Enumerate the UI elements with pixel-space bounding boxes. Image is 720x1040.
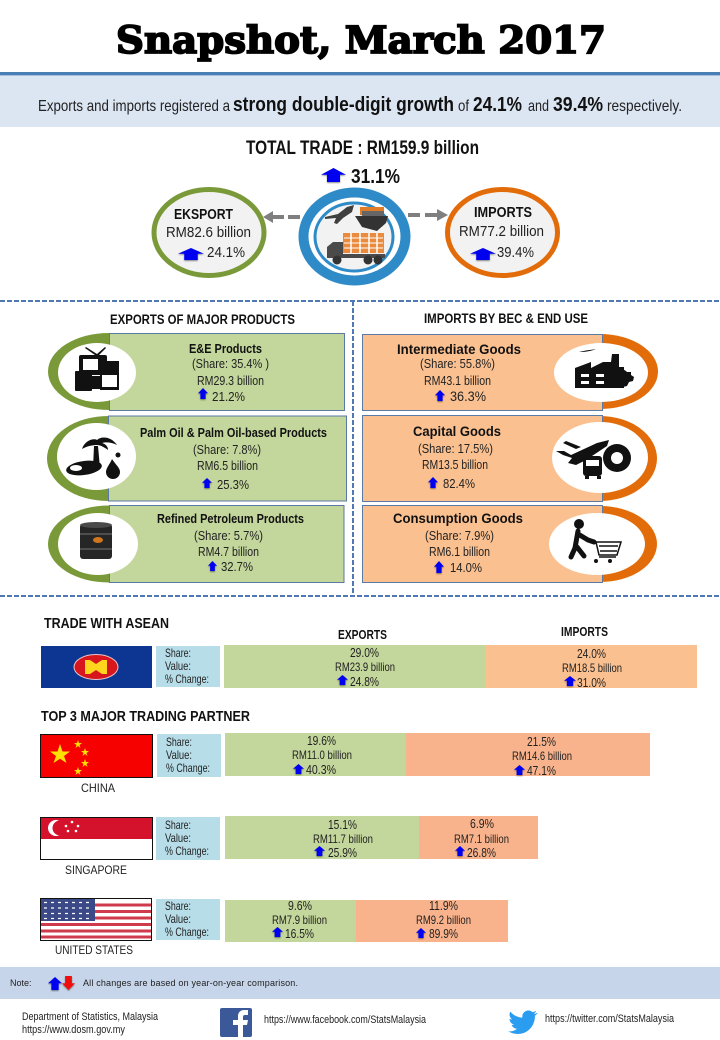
label: United States: UNITED STATES [55, 943, 133, 957]
summary band: 39.4% [553, 94, 603, 116]
bar: China exports: 40.3% [306, 763, 336, 777]
panel: intermediate goods [362, 334, 658, 410]
icon: plane [325, 205, 354, 224]
panel: intermediate goods: 36.3% [450, 389, 486, 404]
panel: intermediate goods: (Share: 55.8%) [420, 356, 495, 371]
panel: capital goods: 82.4% [443, 476, 475, 491]
panel: refined petroleum products: 32.7% [221, 559, 253, 574]
heading: exports of major products: EXPORTS OF MAJOR PRODUCTS [110, 312, 295, 327]
summary band [0, 76, 720, 127]
panel: consumption goods [362, 506, 657, 582]
summary band: strong double-digit growth [233, 94, 454, 116]
footer: department credit [22, 1011, 159, 1036]
bar: Singapore imports [419, 816, 538, 860]
row labels: ASEAN: Value: [165, 659, 191, 673]
summary band: respectively. [607, 98, 682, 115]
panel: E&E products: E&E Products [189, 341, 262, 356]
panel: refined petroleum products: (Share: 5.7%) [194, 528, 263, 543]
row labels: Singapore: % Change: [165, 844, 209, 858]
bar: China imports: 21.5% [527, 735, 556, 749]
bar: China imports: RM14.6 billion [512, 749, 572, 763]
export circle: RM82.6 billion [166, 224, 251, 241]
panel: refined petroleum products: RM4.7 billion [198, 544, 259, 559]
summary band: and [528, 98, 549, 115]
icon: factory [575, 349, 634, 388]
panel: capital goods: RM13.5 billion [422, 457, 488, 472]
panel: palm oil products: RM6.5 billion [197, 458, 258, 473]
panel: capital goods: (Share: 17.5%) [418, 441, 493, 456]
panel: capital goods: Capital Goods [413, 423, 501, 439]
icon: plane, bus and gear [556, 440, 631, 479]
title: Snapshot, March 2017 [116, 18, 606, 62]
panel: E&E products [48, 333, 344, 410]
bar: United States exports: 16.5% [285, 927, 314, 941]
bar: ASEAN exports [224, 645, 485, 689]
arrow: to imports [408, 209, 448, 221]
arrow: to exports [263, 211, 300, 223]
icon: facebook [220, 1008, 252, 1037]
row labels: China [157, 734, 221, 777]
export circle: EKSPORT [174, 207, 233, 223]
row labels: United States: % Change: [165, 925, 209, 939]
bar: United States imports: 89.9% [429, 927, 458, 941]
icon: twitter [508, 1010, 538, 1034]
total trade growth [321, 166, 400, 188]
panel: refined petroleum products: Refined Petroleum Products [157, 511, 304, 526]
panel: consumption goods: RM6.1 billion [429, 544, 490, 559]
panel: consumption goods: 14.0% [450, 560, 482, 575]
panel: E&E products: RM29.3 billion [197, 373, 264, 388]
import circle: 39.4% [497, 244, 534, 261]
row labels: Singapore [156, 817, 220, 860]
note band [0, 967, 720, 999]
bar: United States exports [225, 899, 356, 942]
bar: Singapore exports: RM11.7 billion [313, 832, 373, 846]
panel: palm oil products: 25.3% [217, 477, 249, 492]
bar: ASEAN exports: 29.0% [350, 646, 379, 660]
total trade growth: 31.1% [351, 166, 400, 188]
heading: trade with ASEAN: TRADE WITH ASEAN [44, 615, 169, 632]
icon: truck [327, 233, 385, 264]
bar: China imports: 47.1% [527, 764, 556, 778]
bar: ASEAN exports: RM23.9 billion [335, 660, 395, 674]
bar: United States imports [356, 899, 508, 942]
summary band: Exports and imports registered a [38, 98, 230, 115]
import circle: RM77.2 billion [459, 223, 544, 240]
icon: person with shopping cart [571, 519, 621, 563]
panel: palm oil products: Palm Oil & Palm Oil-based Products [140, 425, 327, 440]
bar: Singapore imports: 6.9% [470, 817, 494, 831]
bar: United States imports: RM9.2 billion [416, 913, 471, 927]
icon: oil barrel [80, 522, 112, 559]
bar: Singapore exports [225, 816, 419, 860]
row labels: China: % Change: [166, 761, 210, 775]
bar: Singapore exports: 25.9% [328, 846, 357, 860]
bar: China exports: 19.6% [307, 734, 336, 748]
row labels: United States: Value: [165, 912, 191, 926]
label: China: CHINA [81, 781, 115, 795]
bar: ASEAN exports: 24.8% [350, 675, 379, 689]
panel: capital goods [362, 416, 657, 502]
export circle: 24.1% [207, 244, 245, 261]
bar: China exports: RM11.0 billion [292, 748, 352, 762]
flag: Singapore [40, 818, 152, 860]
import circle: IMPORTS [474, 205, 532, 221]
note band: Note: [10, 978, 32, 988]
import circle [448, 190, 558, 276]
header rule [0, 72, 720, 76]
panel: palm oil products [47, 416, 346, 501]
row labels: China: Value: [166, 748, 192, 762]
panel: intermediate goods: Intermediate Goods [397, 341, 521, 357]
bar: United States imports: 11.9% [429, 899, 458, 913]
footer: department credit: https://www.dosm.gov.my [22, 1024, 125, 1036]
note band: All changes are based on year-on-year comparison. [83, 978, 298, 988]
row labels: United States [156, 899, 220, 940]
twitter link: https://twitter.com/StatsMalaysia [545, 1013, 675, 1025]
row labels: Singapore: Share: [165, 818, 191, 832]
bar: Singapore imports: RM7.1 billion [454, 832, 509, 846]
bar: United States exports: 9.6% [288, 899, 312, 913]
bar: ASEAN imports: 24.0% [577, 647, 606, 661]
column label: imports: IMPORTS [561, 625, 608, 639]
bar: United States exports: RM7.9 billion [272, 913, 327, 927]
footer: department credit: Department of Statistics, Malaysia [22, 1011, 159, 1023]
facebook link: https://www.facebook.com/StatsMalaysia [264, 1014, 427, 1026]
centre trade circle with truck, ship and plane icon [304, 192, 406, 280]
flag: China [40, 734, 152, 778]
panel: E&E products: 21.2% [212, 389, 245, 404]
heading: imports by BEC and end use: IMPORTS BY BEC & END USE [424, 311, 588, 326]
row labels: ASEAN: Share: [165, 646, 191, 660]
bar: China imports [406, 733, 650, 778]
bar: ASEAN imports: RM18.5 billion [562, 661, 622, 675]
panel: intermediate goods: RM43.1 billion [424, 373, 491, 388]
heading: top 3 major trading partner: TOP 3 MAJOR TRADING PARTNER [41, 708, 250, 725]
row labels: ASEAN: % Change: [165, 672, 209, 686]
panel: palm oil products: (Share: 7.8%) [193, 442, 261, 457]
flag: United States [40, 898, 152, 940]
bar: ASEAN imports [485, 645, 697, 690]
row labels: China: Share: [166, 735, 192, 749]
bar: China exports [225, 733, 406, 777]
row labels: ASEAN [156, 646, 220, 687]
export circle [154, 190, 264, 276]
panel: consumption goods: Consumption Goods [393, 510, 523, 526]
row labels: United States: Share: [165, 899, 191, 913]
bar: ASEAN imports: 31.0% [577, 676, 606, 690]
column label: exports: EXPORTS [338, 628, 387, 642]
label: Singapore: SINGAPORE [65, 863, 127, 877]
bar: Singapore imports: 26.8% [467, 846, 496, 860]
bar: Singapore exports: 15.1% [328, 818, 357, 832]
icon: ship [355, 207, 388, 231]
panel: refined petroleum products [48, 506, 344, 582]
panel: consumption goods: (Share: 7.9%) [425, 528, 494, 543]
total trade heading: TOTAL TRADE : RM159.9 billion [246, 138, 479, 159]
panel: E&E products: (Share: 35.4% ) [192, 356, 269, 371]
row labels: Singapore: Value: [165, 831, 191, 845]
icon: electronics [75, 347, 119, 391]
summary band: of [458, 98, 469, 115]
flag: ASEAN [41, 646, 152, 688]
icon: palm tree, fruit and oil drop [65, 437, 120, 479]
summary band: 24.1% [473, 94, 522, 116]
